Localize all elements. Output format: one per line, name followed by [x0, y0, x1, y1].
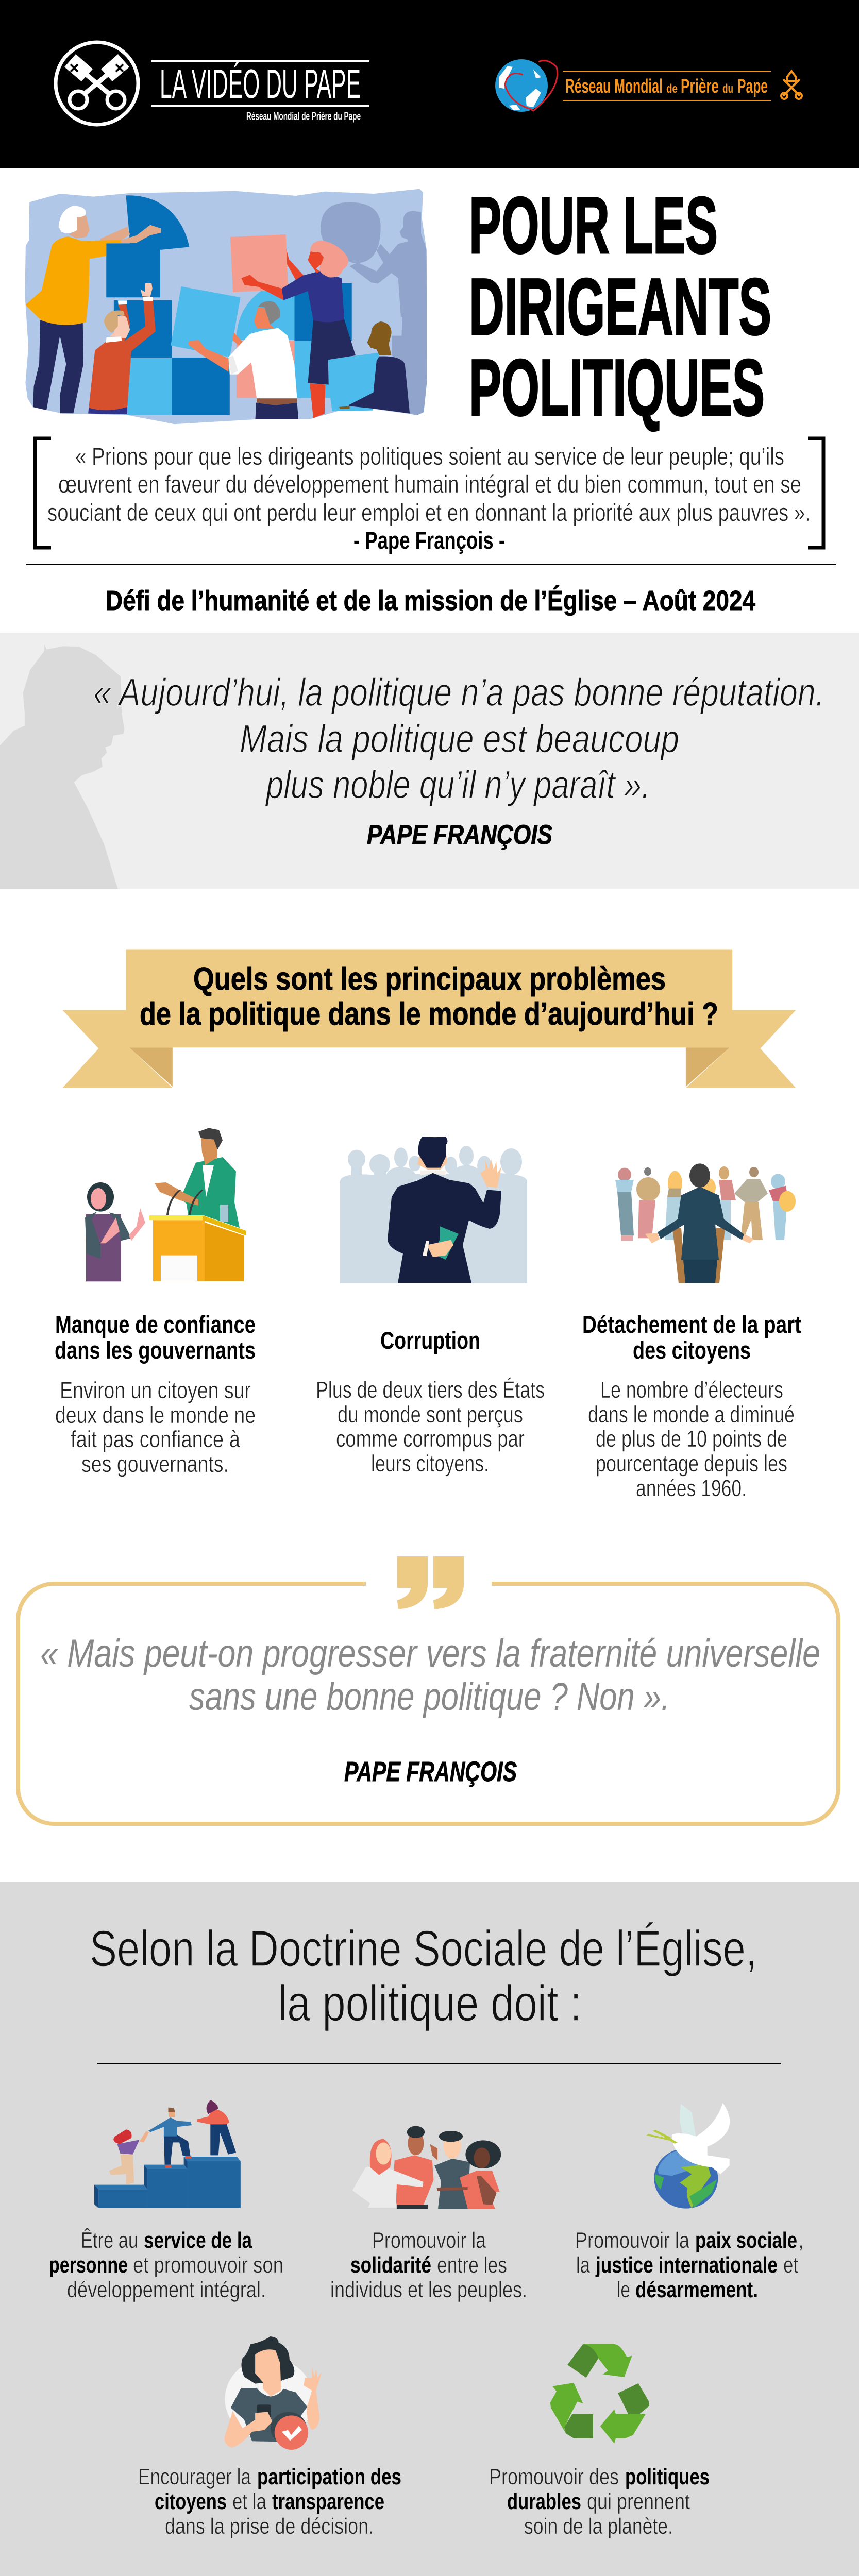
logo text: Réseau Mondial de Prière du Pape	[563, 71, 771, 101]
panel: corruption	[316, 1327, 545, 1477]
panel: second quote box: sans une bonne politique ? Non ».	[189, 1675, 670, 1719]
heading	[90, 1920, 757, 2031]
icon: quotation marks	[397, 1556, 464, 1609]
panel: lack of trust: Manque de confiance	[55, 1311, 256, 1338]
text: service of the person: Être au	[81, 2228, 138, 2253]
text: participation and transparency: Encourager la	[138, 2464, 251, 2489]
text: sustainable policies: qui prennent	[587, 2489, 690, 2514]
text: service of the person	[49, 2228, 283, 2302]
panel: lack of trust: deux dans le monde ne	[55, 1402, 256, 1428]
panel: corruption: leurs citoyens.	[371, 1450, 489, 1477]
panel: Pope quote on grey band	[0, 633, 859, 889]
text: participation and transparency: et la	[232, 2489, 266, 2514]
text: social peace	[575, 2228, 804, 2302]
text: solidarity: solidarité	[350, 2252, 431, 2278]
text: participation and transparency: citoyens	[155, 2489, 227, 2514]
logo text: La Vidéo du Pape: Réseau Mondial de Prière du Pape	[246, 110, 361, 123]
text: sustainable policies: politiques	[625, 2464, 710, 2489]
panel: social doctrine	[0, 1882, 859, 2576]
panel: corruption: du monde sont perçus	[338, 1401, 523, 1428]
quote text: Mais la politique est beaucoup	[240, 717, 679, 761]
panel: corruption: Corruption	[380, 1327, 480, 1354]
panel: lack of trust: dans les gouvernants	[55, 1336, 256, 1364]
text: social peace: justice internationale	[595, 2252, 778, 2278]
text: service of the person: et promouvoir son	[133, 2252, 283, 2278]
banner: main problems: de la politique dans le monde d’aujourd’hui ?	[140, 996, 718, 1032]
text: social peace: désarmement.	[635, 2277, 758, 2302]
text: sustainable policies: Promouvoir des	[489, 2464, 619, 2489]
attribution: PAPE FRANÇOIS	[367, 820, 552, 850]
icon: detached citizens facing politician	[615, 1163, 796, 1283]
text: sustainable policies	[489, 2464, 710, 2539]
logo: globe with heart	[495, 59, 558, 112]
panel: citizen detachment: dans le monde a diminué	[588, 1401, 795, 1428]
logo text: La Vidéo du Pape: LA VIDÉO DU PAPE	[160, 61, 361, 107]
prayer intention quote: - Pape François -	[353, 527, 505, 554]
text: service of the person: développement intégral.	[67, 2277, 266, 2302]
text: solidarity: Promouvoir la	[372, 2228, 486, 2253]
logo: La Vidéo du Pape crossed keys	[56, 42, 138, 125]
icon: group of diverse people	[352, 2126, 501, 2209]
logo text: Réseau Mondial de Prière du Pape: de	[666, 82, 678, 96]
panel: header	[0, 0, 859, 168]
panel: lack of trust: ses gouvernants.	[81, 1451, 229, 1477]
logo text: Réseau Mondial de Prière du Pape: Prière	[681, 76, 719, 97]
banner: main problems: Quels sont les principaux problèmes	[193, 961, 666, 997]
text: participation and transparency	[138, 2464, 401, 2539]
banner: main problems	[62, 949, 796, 1088]
panel: lack of trust: fait pas confiance à	[71, 1426, 241, 1452]
text: participation and transparency: transparence	[272, 2489, 384, 2514]
icon: small orange keys	[781, 71, 802, 99]
logo text: La Vidéo du Pape	[151, 60, 369, 123]
attribution: PAPE FRANÇOIS	[344, 1756, 517, 1787]
text: participation and transparency: participation des	[257, 2464, 401, 2489]
quote text: plus noble qu’il n’y paraît ».	[265, 763, 650, 807]
text: social peace: Promouvoir la	[575, 2228, 689, 2253]
text: solidarity: entre les	[437, 2252, 507, 2278]
title	[469, 181, 771, 433]
panel: citizen detachment: pourcentage depuis les	[596, 1450, 787, 1477]
panel: corruption: Plus de deux tiers des États	[316, 1377, 545, 1403]
panel: lack of trust: Environ un citoyen sur	[60, 1377, 251, 1403]
icon: silhouette of Pope Francis	[0, 643, 124, 889]
text: sustainable policies: soin de la planète.	[524, 2514, 673, 2539]
text: sustainable policies: durables	[507, 2489, 581, 2514]
text: solidarity	[330, 2228, 527, 2302]
panel: citizen detachment	[582, 1311, 801, 1501]
panel: citizen detachment: des citoyens	[633, 1336, 751, 1364]
quote text	[93, 671, 824, 807]
text: social peace: et	[783, 2252, 798, 2278]
text: social peace: la	[576, 2252, 590, 2278]
icon: woman refusing politician at lectern	[85, 1128, 246, 1281]
icon: corrupt politician behind back	[340, 1137, 527, 1283]
text: solidarity: individus et les peuples.	[330, 2277, 527, 2302]
subtitle: Défi de l’humanité et de la mission de l’Église – Août 2024	[106, 585, 755, 616]
logo text: Réseau Mondial de Prière du Pape: du	[722, 82, 733, 96]
text: social peace: ,	[798, 2228, 804, 2253]
text: service of the person: personne	[49, 2252, 128, 2278]
text: service of the person: service de la	[144, 2228, 252, 2253]
text: participation and transparency: dans la prise de décision.	[165, 2514, 374, 2539]
panel: citizen detachment: années 1960.	[636, 1475, 747, 1501]
logo text: Réseau Mondial de Prière du Pape: Pape	[737, 76, 768, 97]
panel: citizen detachment: Détachement de la part	[582, 1311, 801, 1338]
icon: recycling arrows	[550, 2344, 649, 2444]
icon: dove over earth	[647, 2103, 730, 2209]
illustration: people building a puzzle together	[25, 189, 427, 424]
icon: people climbing stairs helping each other	[94, 2100, 241, 2208]
text: social peace: le	[617, 2277, 630, 2302]
icon: woman with phone and check badge	[225, 2336, 322, 2450]
prayer intention quote	[35, 438, 823, 554]
panel: citizen detachment: de plus de 10 points de	[596, 1426, 787, 1452]
panel: second quote box	[18, 1556, 838, 1824]
text: social peace: paix sociale	[695, 2228, 797, 2253]
logo text: Réseau Mondial de Prière du Pape: Réseau Mondial	[565, 76, 663, 97]
panel: corruption: comme corrompus par	[336, 1426, 525, 1452]
panel: citizen detachment: Le nombre d’électeurs	[600, 1377, 783, 1403]
panel: lack of trust	[55, 1311, 256, 1477]
heading: la politique doit :	[278, 1975, 582, 2031]
